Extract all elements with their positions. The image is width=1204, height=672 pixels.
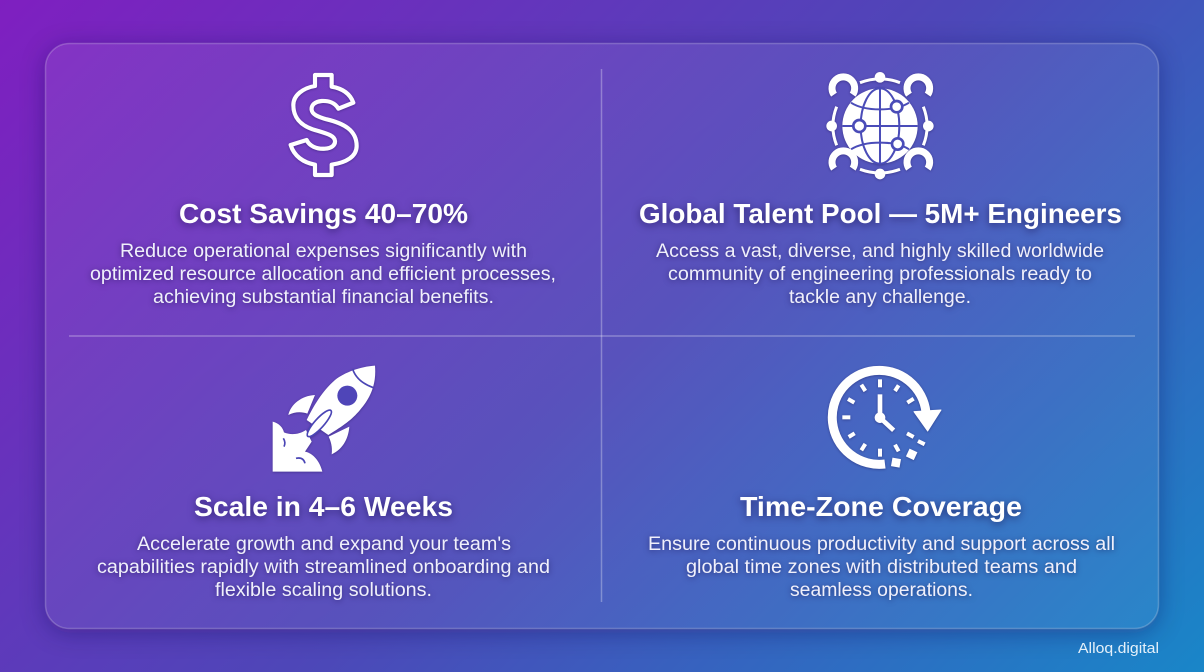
text block: Access a vast, diverse, and highly skilled worldwide [656,241,1104,262]
text block: seamless operations. [790,580,973,601]
brand label: Alloq.digital [1078,641,1159,657]
icon: dollar sign [291,75,357,175]
icon: globe with people [826,72,934,179]
text block: Reduce operational expenses significantly with [120,241,527,262]
heading: Cost Savings 40–70% [179,198,468,229]
text block: tackle any challenge. [789,287,971,308]
panel: global talent [639,72,1122,308]
panel: scale [97,366,550,601]
text block [648,534,1115,601]
text block [656,241,1104,308]
text block [97,534,550,601]
heading: Scale in 4–6 Weeks [194,491,453,522]
text block: capabilities rapidly with streamlined onboarding and [97,557,550,578]
panel: time zones [648,370,1115,601]
text block: Ensure continuous productivity and support across all [648,534,1115,555]
text block [90,241,556,308]
text block: global time zones with distributed teams and [686,557,1077,578]
text block: Accelerate growth and expand your team's [137,534,511,555]
text block: community of engineering professionals ready to [668,264,1092,285]
text block: achieving substantial financial benefits. [153,287,494,308]
panel: cost savings [90,75,556,308]
icon: clock [832,370,941,468]
heading: Global Talent Pool — 5M+ Engineers [639,198,1122,229]
text block: flexible scaling solutions. [215,580,432,601]
icon: rocket [273,366,375,472]
heading: Time-Zone Coverage [740,491,1022,522]
text block: optimized resource allocation and efficient processes, [90,264,556,285]
